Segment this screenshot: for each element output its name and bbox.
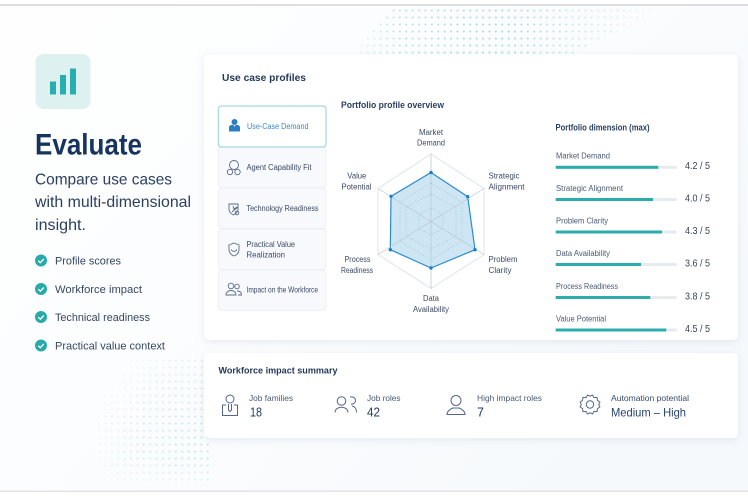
radar outer grid [378,154,484,288]
subtitle text block: Compare use cases [35,172,172,188]
heading: use case profiles: Use case profiles [222,72,306,84]
radar axes [378,154,484,288]
item: technical readiness: Technical readiness [55,312,150,324]
panel: workforce impact summary [204,353,738,438]
radar axis labels: Readiness [341,266,373,275]
radar axis labels: Demand [417,138,445,148]
radar axis labels: Problem [488,255,518,264]
checklist [35,254,165,352]
card: technology readiness [218,188,326,228]
bar: strategic alignment [556,184,710,204]
subtitle text block: insight. [35,217,86,234]
panel: use case profiles [204,54,738,340]
stat: high impact roles: High impact roles [477,393,542,403]
heading: portfolio profile overview: Portfolio profile overview [341,100,445,110]
bar: process readiness: 3.8 / 5 [685,290,710,302]
bar: strategic alignment: 4.0 / 5 [685,192,710,204]
stat: high impact roles: 7 [477,406,484,420]
stat: job roles: Job roles [367,393,400,403]
radar data area [390,172,475,268]
radar axis labels: Process [344,255,370,264]
radar axis labels: Value [347,172,367,180]
card: use-case demand (selected) [218,106,326,147]
bar: data availability: Data Availability [556,249,610,258]
stat: automation potential: Automation potential [611,393,689,403]
radar inner rings [400,183,462,260]
stat: high impact roles [447,393,542,420]
item: practical value context: Practical value context [55,340,165,352]
subtitle text block [34,172,191,234]
radar axis labels [341,128,525,314]
bar: process readiness [556,282,710,302]
bar: problem clarity [556,216,710,237]
card: agent capability fit [218,147,326,188]
title: Evaluate [35,128,142,162]
bar: process readiness: Process Readiness [556,282,618,291]
bar: strategic alignment: Strategic Alignment [556,184,624,193]
stat: automation potential: Medium – High [611,406,686,420]
bar: market demand: Market Demand [556,152,610,160]
radar axis labels: Strategic [488,172,520,180]
bar list: portfolio dimensions [556,152,710,335]
radar axis labels: Clarity [488,266,512,275]
bar: value potential [556,314,710,335]
stat: job families: 18 [250,406,262,420]
item: workforce impact: Workforce impact [55,284,142,296]
icon: bar chart badge [36,54,90,109]
stat: job roles: 42 [367,406,380,420]
bar: data availability: 3.6 / 5 [685,257,710,269]
bar: value potential: Value Potential [556,314,606,324]
card: technology readiness: Technology Readiness [246,204,318,213]
card: practical value realization: Practical Value [246,240,296,249]
card: impact on the workforce [218,270,326,310]
bar: market demand: 4.2 / 5 [685,160,710,172]
bar: data availability [556,249,710,269]
stat: job families [222,393,293,420]
bar: market demand [556,152,710,172]
card: practical value realization [218,229,326,270]
card: use-case demand (selected): Use-Case Demand [247,122,308,131]
radar axis labels: Data [423,294,440,303]
heading: workforce impact summary: Workforce impact summary [218,366,338,376]
radar axis labels: Market [419,128,444,137]
bar: value potential: 4.5 / 5 [685,323,710,335]
subtitle text block: with multi-dimensional [34,194,191,211]
radar axis labels: Potential [342,182,372,192]
card: impact on the workforce: Impact on the Workforce [246,286,318,294]
heading: portfolio dimension: Portfolio dimension (max) [556,122,650,132]
radar axis labels: Availability [413,305,449,314]
stat: automation potential [580,393,689,420]
radar chart [341,128,525,314]
bar: problem clarity: 4.3 / 5 [685,225,710,237]
card: agent capability fit: Agent Capability Fit [246,163,312,172]
radar data points [389,171,477,270]
item: profile scores: Profile scores [55,256,121,268]
stat: job roles [335,393,400,420]
card: practical value realization: Realization [246,250,285,260]
bar: problem clarity: Problem Clarity [556,216,608,226]
stat: job families: Job families [249,393,293,403]
radar axis labels: Alignment [488,182,525,192]
